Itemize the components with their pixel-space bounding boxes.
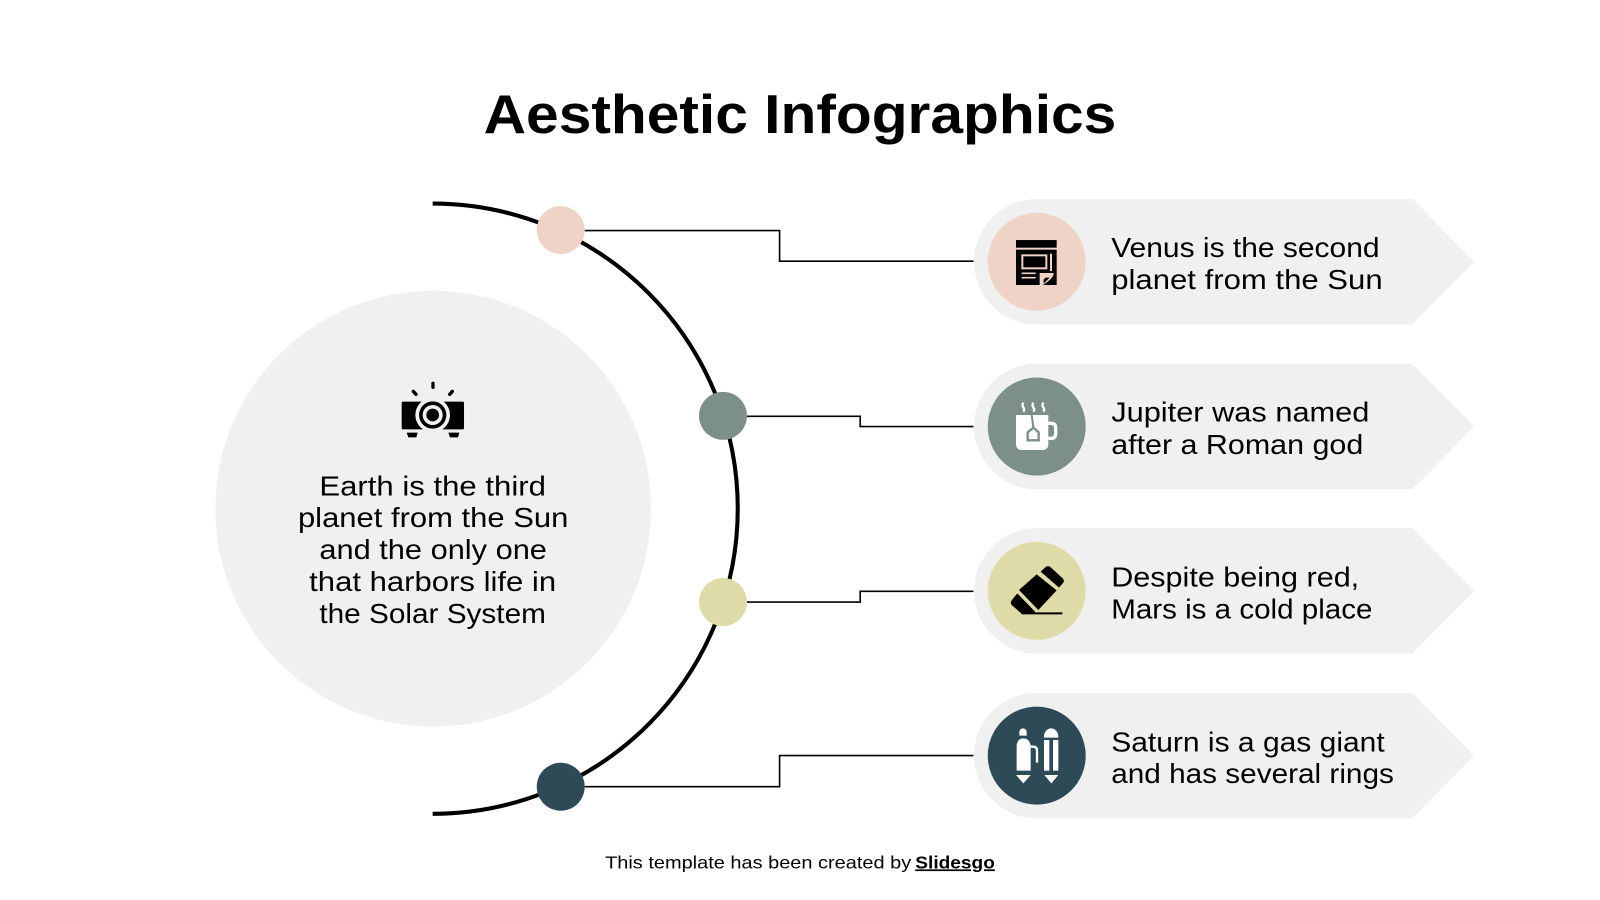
footer credit: Slidesgo	[915, 852, 995, 872]
connector: Saturn	[585, 756, 973, 787]
connector: Jupiter	[747, 416, 973, 427]
text: Mars	[1111, 562, 1372, 624]
node: yellow	[699, 578, 747, 626]
connector: Mars	[747, 591, 973, 602]
panel: Venus	[974, 199, 1474, 324]
text: Jupiter: Jupiter was named	[1111, 396, 1369, 427]
text: Mars: Mars is a cold place	[1111, 593, 1372, 624]
text: Jupiter	[1111, 396, 1369, 460]
text: central description: and the only one	[319, 534, 547, 565]
text: Venus	[1111, 232, 1383, 295]
node: pink	[537, 206, 585, 254]
panel: Saturn	[974, 693, 1474, 818]
title: Aesthetic Infographics	[484, 84, 1116, 145]
icon: eraser	[1011, 566, 1064, 614]
text: central description: the Solar System	[319, 598, 546, 629]
panel: central circle	[215, 291, 651, 727]
panel: Mars	[974, 528, 1474, 654]
text: Venus: Venus is the second	[1111, 232, 1380, 263]
text: Saturn	[1111, 727, 1394, 789]
text: Mars: Despite being red,	[1111, 562, 1359, 593]
node: sage	[699, 392, 747, 440]
text: Venus: planet from the Sun	[1111, 264, 1383, 295]
node: navy	[537, 763, 585, 811]
icon: tea mug	[1016, 403, 1056, 450]
text: central description	[298, 470, 568, 629]
panel: Jupiter	[974, 364, 1474, 489]
text: central description: that harbors life in	[309, 566, 556, 597]
icon: notepad	[1016, 239, 1057, 285]
text: Saturn: and has several rings	[1111, 758, 1394, 789]
arc	[433, 204, 738, 814]
text: Saturn: Saturn is a gas giant	[1111, 727, 1385, 758]
icon: pens	[1016, 728, 1058, 783]
text: Jupiter: after a Roman god	[1111, 429, 1363, 460]
icon: projector	[402, 383, 464, 437]
footer credit: This template has been created by	[605, 852, 912, 872]
footer credit	[605, 852, 995, 872]
text: central description: Earth is the third	[319, 470, 546, 501]
text: central description: planet from the Sun	[298, 502, 568, 533]
connector: Venus	[585, 231, 973, 261]
